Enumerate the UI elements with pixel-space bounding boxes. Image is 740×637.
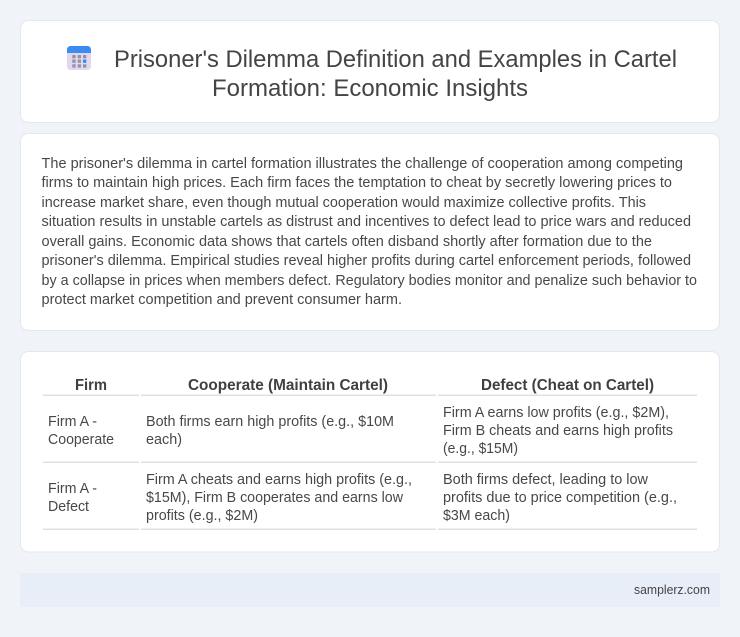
table row: Firm A cooperate: (e.g., $15M) — [443, 441, 518, 457]
table row: Firm A defect: $15M), Firm B cooperates and earns low — [146, 490, 403, 506]
icon: calendar — [67, 46, 91, 70]
table row: Firm A cooperate — [48, 405, 673, 457]
table row: Firm A cooperate: Cooperate — [48, 432, 114, 448]
table row: Firm A defect: $3M each) — [443, 508, 510, 524]
title: Prisoner's Dilemma Definition and Examples in Cartel — [114, 46, 677, 73]
footer source text: samplerz.com — [634, 582, 710, 597]
table header row: Firm — [75, 377, 107, 394]
table header row — [75, 377, 654, 394]
text block: description paragraph: situation results in unstable cartels as distrust and incentives to defect lead to price wars and reduced — [42, 213, 691, 230]
table row: Firm A cooperate: Firm A - — [48, 414, 97, 430]
table row: Firm A defect: profits (e.g., $2M) — [146, 508, 258, 524]
table header row: Cooperate (Maintain Cartel) — [188, 377, 388, 394]
text block: description paragraph: The prisoner's dilemma in cartel formation illustrates the challenge of cooperation among competing — [42, 155, 683, 172]
table header row: Defect (Cheat on Cartel) — [481, 377, 654, 394]
table row: Firm A defect: Defect — [48, 499, 89, 515]
table row: Firm A defect: Firm A - — [48, 481, 97, 497]
table row: Firm A defect: profits due to price competition (e.g., — [443, 490, 677, 506]
text block: description paragraph: prisoner's dilemma. Empirical studies reveal higher profits during cartel enforcement periods, followed — [42, 252, 691, 269]
table row: Firm A defect: Both firms defect, leading to low — [443, 472, 648, 488]
footer bar — [20, 573, 720, 607]
table row: Firm A cooperate: Firm B cheats and earns high profits — [443, 423, 673, 439]
text block: description paragraph: overall gains. Economic data shows that cartels often disband shortly after formation due to the — [42, 233, 652, 250]
text block: description paragraph: by a collapse in prices when members defect. Regulatory bodies monitor and penalize such behavior to — [42, 272, 697, 289]
text block: description paragraph: protect market competition and prevent consumer harm. — [42, 291, 402, 308]
panel: title header — [20, 20, 720, 122]
panel: payoff table — [20, 352, 720, 552]
title — [114, 46, 677, 102]
table row: Firm A cooperate: Firm A earns low profits (e.g., $2M), — [443, 405, 669, 421]
text block: description paragraph: firms to maintain high prices. Each firm faces the temptation to cheat by secretly lowering prices to — [42, 174, 672, 191]
text block: description paragraph: increase market share, even though mutual cooperation would maximize collective profits. This — [42, 194, 646, 211]
table row: Firm A cooperate: Both firms earn high profits (e.g., $10M — [146, 414, 394, 430]
table row: Firm A defect: Firm A cheats and earns high profits (e.g., — [146, 472, 412, 488]
table row: Firm A cooperate: each) — [146, 432, 182, 448]
panel: description — [20, 134, 720, 330]
text block: description paragraph — [42, 155, 697, 308]
title: Formation: Economic Insights — [212, 75, 528, 102]
table row: Firm A defect — [48, 472, 677, 524]
